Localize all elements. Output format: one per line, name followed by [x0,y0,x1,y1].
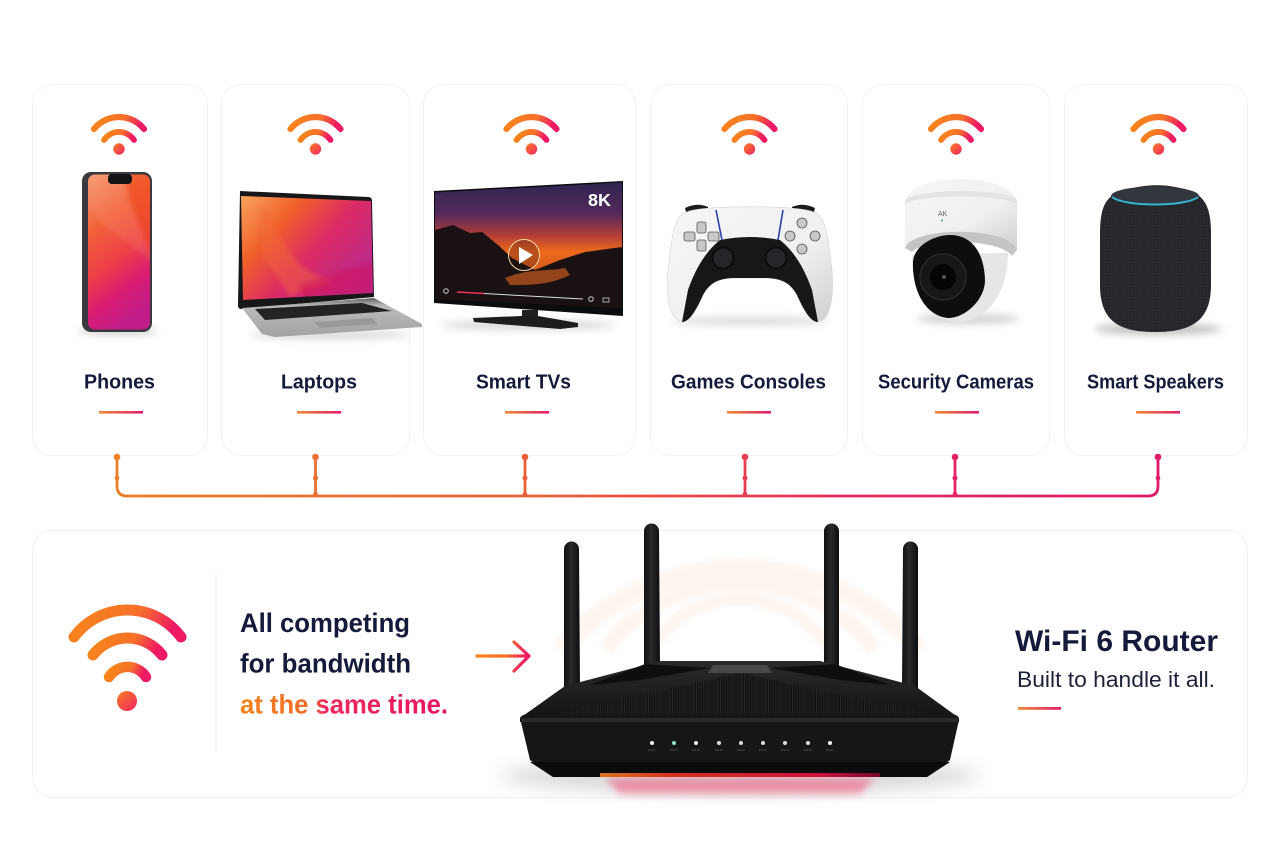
label: Laptops: Laptops [281,372,357,394]
faint signal arcs behind router [560,569,920,650]
device: smartphone [78,172,158,335]
panel: phones [32,84,208,456]
label: camera logo: AK [938,211,948,218]
icon: wifi signal [94,117,144,155]
panel: games consoles [650,84,848,456]
accent underline [505,411,549,414]
status LEDs [648,741,834,750]
label: Security Cameras: Security Cameras [878,372,1034,394]
device: television [434,181,623,330]
router [500,524,980,794]
accent underline [1018,707,1061,710]
play button [508,240,540,270]
icon: wifi signal [724,117,774,155]
panel: laptops [222,84,422,456]
panel: smart TVs [424,84,636,456]
device: laptop [238,191,422,339]
icon: wifi signal [290,117,340,155]
label: Phones: Phones [84,372,155,394]
label: 8K badge: 8K [588,190,611,210]
panel: bandwidth summary [32,524,1248,798]
accent underline [297,411,341,414]
device: smart speaker [1094,185,1222,335]
label: Smart Speakers: Smart Speakers [1087,372,1224,394]
headline: competing for bandwidth: at the same time. [240,690,448,720]
antennas [564,524,918,695]
label: Games Consoles: Games Consoles [671,372,826,394]
icon: wifi signal [931,117,981,155]
accent underline [935,411,979,414]
accent underline [727,411,771,414]
device: game controller [667,205,833,325]
headline: competing for bandwidth [240,608,448,720]
icon: wifi signal [1134,117,1184,155]
accent underline [99,411,143,414]
device: dome camera [905,179,1020,324]
infographic canvas [32,84,1248,802]
subheading: Built to handle it all. [1017,667,1215,692]
connector lines from devices [114,454,1161,496]
accent underline [1136,411,1180,414]
arrow to router [477,642,529,671]
panel: security cameras [862,84,1050,456]
heading: Wi-Fi 6 Router: Wi-Fi 6 Router [1015,625,1218,658]
headline: competing for bandwidth: All competing [240,608,410,638]
icon: wifi signal [506,117,556,155]
video progress bar [444,289,609,302]
headline: competing for bandwidth: for bandwidth [240,648,411,678]
large wifi icon [74,610,181,711]
panel: smart speakers [1064,84,1248,456]
label: Smart TVs: Smart TVs [476,372,571,394]
